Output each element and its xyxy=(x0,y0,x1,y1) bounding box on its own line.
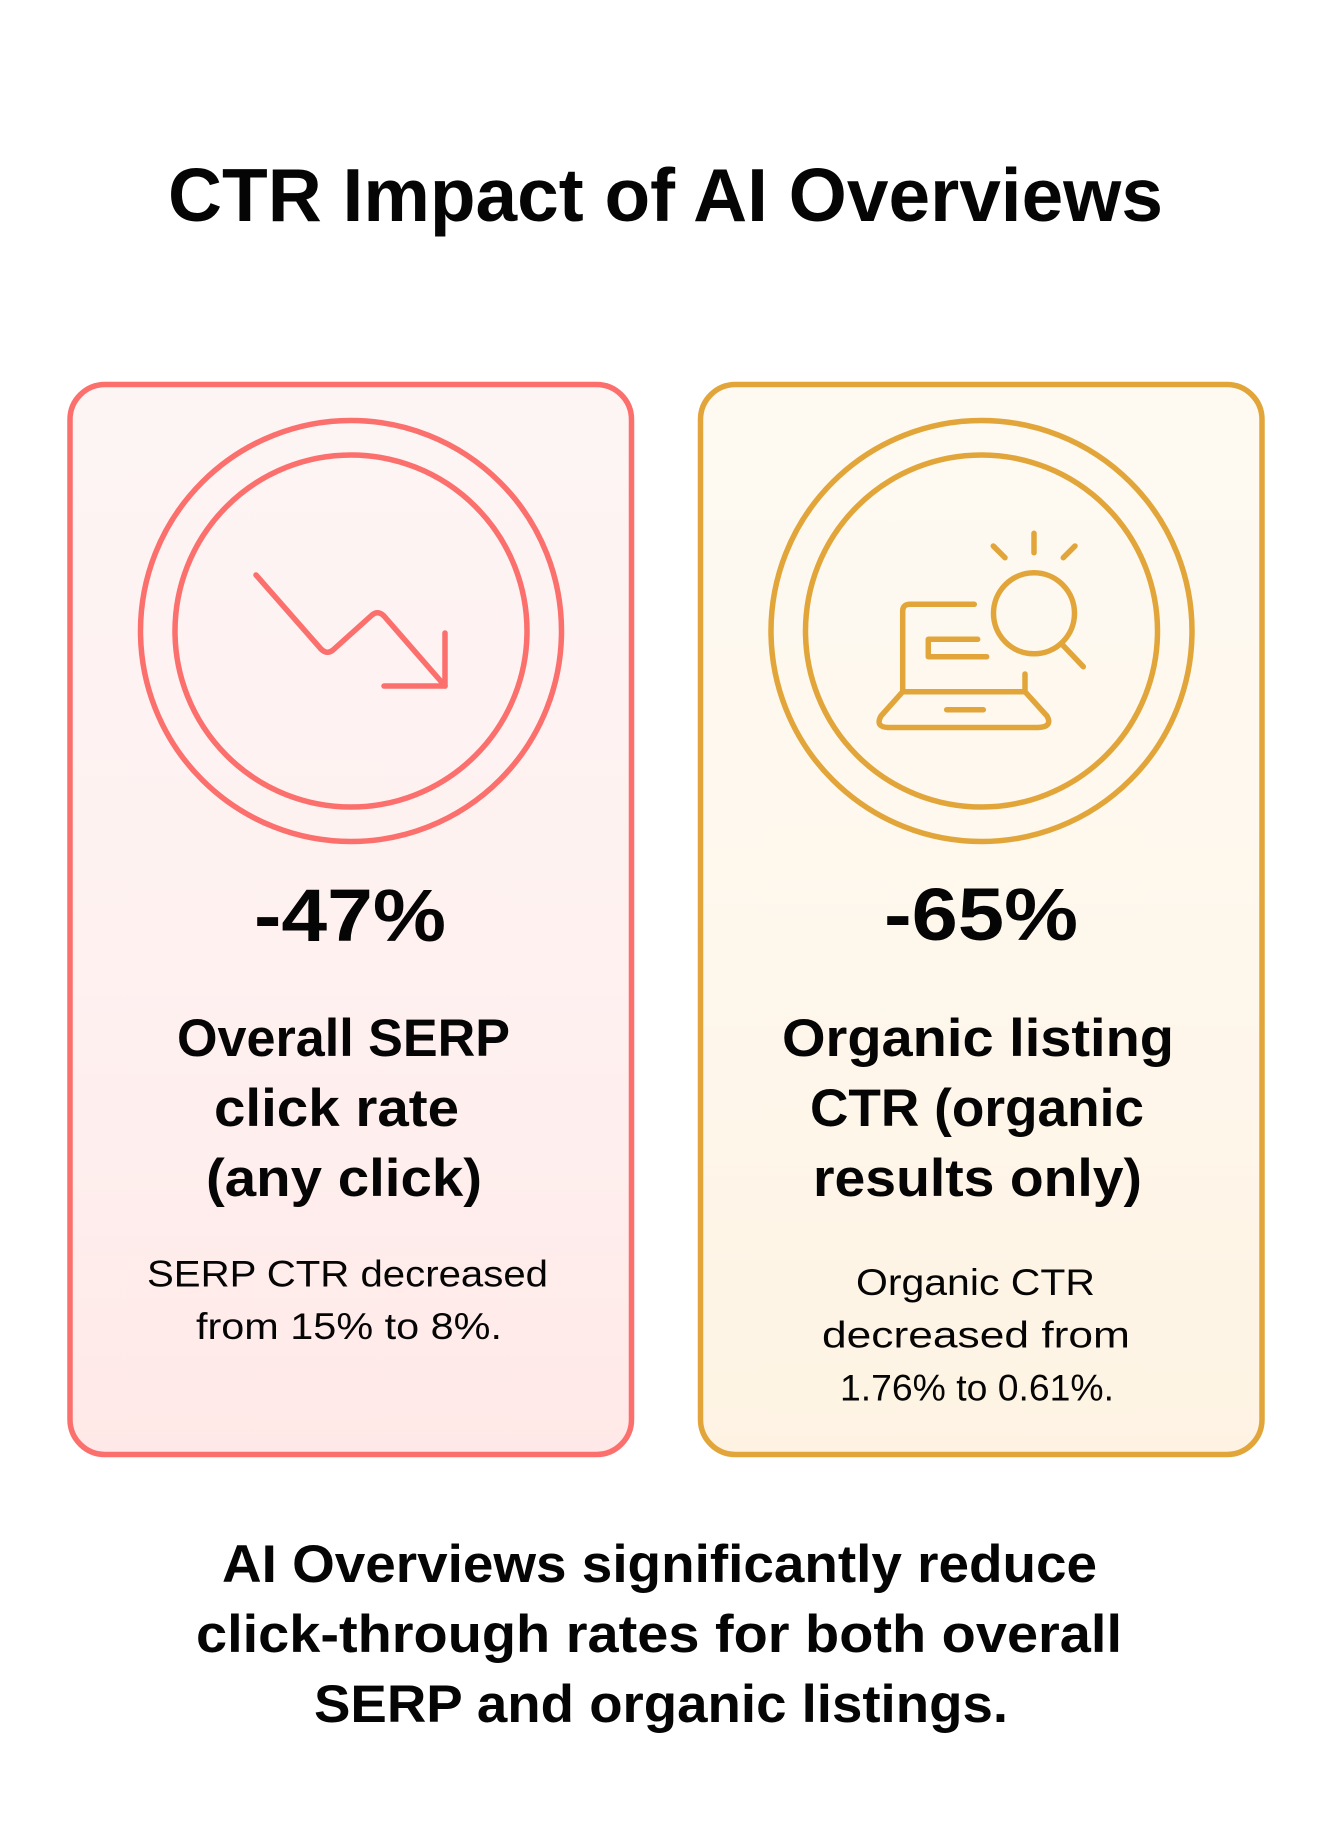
heading: overall SERP click rate (any click): (any click) xyxy=(206,1149,482,1208)
description: SERP CTR change: from 15% to 8%. xyxy=(196,1306,502,1347)
card background xyxy=(70,384,632,1454)
description: organic CTR change: decreased from xyxy=(822,1314,1130,1356)
conclusion text xyxy=(196,1535,1122,1734)
heading: overall SERP click rate (any click): Overall SERP xyxy=(177,1009,510,1068)
panel: organic listing CTR xyxy=(700,384,1262,1454)
conclusion text: SERP and organic listings. xyxy=(314,1675,1008,1734)
stat: -65%: -65% xyxy=(884,873,1078,956)
heading: overall SERP click rate (any click) xyxy=(177,1009,510,1208)
description: organic CTR change: Organic CTR xyxy=(856,1262,1095,1303)
conclusion text: AI Overviews significantly reduce xyxy=(222,1535,1097,1594)
panel: overall SERP click rate xyxy=(70,384,632,1454)
heading: overall SERP click rate (any click): click rate xyxy=(214,1079,459,1138)
description: organic CTR change xyxy=(822,1262,1130,1408)
card background xyxy=(700,384,1262,1454)
heading: organic listing CTR (organic results only): results only) xyxy=(813,1149,1142,1208)
description: SERP CTR change: SERP CTR decreased xyxy=(147,1254,548,1294)
icon: double ring with laptop and magnifier xyxy=(771,420,1192,842)
description: organic CTR change: 1.76% to 0.61%. xyxy=(840,1368,1114,1408)
icon: double ring with falling trend arrow xyxy=(140,420,562,842)
description: SERP CTR change xyxy=(147,1254,548,1347)
title: CTR Impact of AI Overviews xyxy=(168,153,1163,237)
conclusion text: click-through rates for both overall xyxy=(196,1605,1122,1664)
heading: organic listing CTR (organic results only) xyxy=(782,1009,1174,1208)
stat: -47%: -47% xyxy=(254,874,446,957)
heading: organic listing CTR (organic results only): CTR (organic xyxy=(810,1079,1144,1138)
heading: organic listing CTR (organic results only): Organic listing xyxy=(782,1009,1174,1068)
